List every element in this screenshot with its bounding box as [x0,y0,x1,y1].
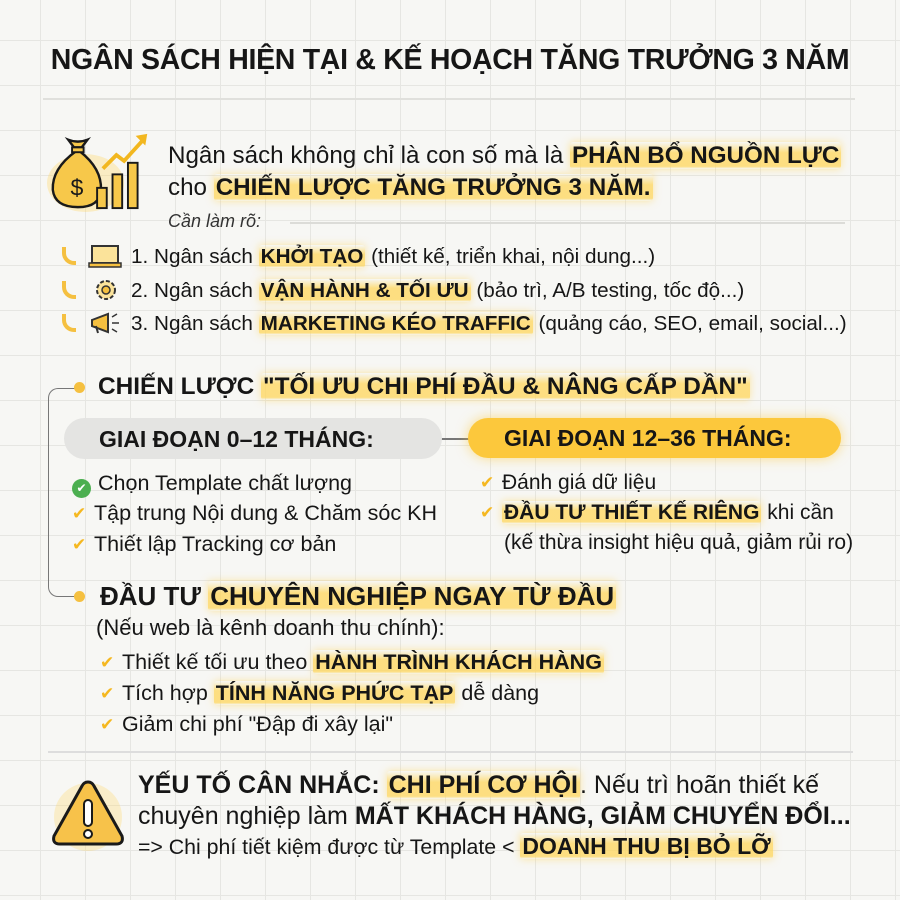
phase 1 bullets: ✔ [72,535,86,554]
dot [74,382,85,393]
icon: warning triangle [52,780,124,851]
title: NGÂN SÁCH HIỆN TẠI & KẾ HOẠCH TĂNG TRƯỞNG 3 NĂM [51,44,849,76]
invest bullets: Tích hợp TÍNH NĂNG PHỨC TẠP dễ dàng [122,681,539,705]
heading: invest professionally: ĐẦU TƯ CHUYÊN NGHIỆP NGAY TỪ ĐẦU [100,581,614,611]
connector line between pills [440,438,472,440]
phase 1 bullets: Chọn Template chất lượng [98,471,352,495]
item 1 [62,240,655,273]
pill: phase 0-12 [64,418,442,459]
icon: money bag with growth chart: $ [70,175,83,201]
pill: phase 0-12: GIAI ĐOẠN 0–12 THÁNG: [99,426,374,452]
invest bullets [100,645,609,736]
item 2: 2. Ngân sách VẬN HÀNH & TỐI ƯU (bảo trì, A/B testing, tốc độ...) [131,279,744,302]
phase 2 bullets: ✔ [480,473,494,492]
phase 2 bullets: ✔ [480,503,494,522]
warning text: chuyên nghiệp làm MẤT KHÁCH HÀNG, GIẢM CHUYỂN ĐỔI... [138,802,851,830]
warning text [138,766,851,864]
pill: phase 12-36: GIAI ĐOẠN 12–36 THÁNG: [504,425,792,451]
warning text: => Chi phí tiết kiệm được từ Template < DOANH THU BỊ BỎ LỠ [138,833,771,859]
item 3: 3. Ngân sách MARKETING KÉO TRAFFIC (quảng cáo, SEO, email, social...) [131,312,847,335]
phase 1 bullets: ✔ [72,504,86,523]
phase 2 bullets: (kế thừa insight hiệu quả, giảm rủi ro) [504,531,853,554]
intro text [168,137,846,206]
invest bullets: ✔ [100,684,114,703]
phase 2 bullets [480,471,853,554]
invest bullets: Giảm chi phí "Đập đi xây lại" [122,712,393,736]
item 1: 1. Ngân sách KHỞI TẠO (thiết kế, triển khai, nội dung...) [131,245,655,268]
icon: money bag with growth chart [47,134,148,212]
phase 1 bullets: ✔ [76,481,87,495]
dot [74,591,85,602]
intro text: Ngân sách không chỉ là con số mà là PHÂN BỔ NGUỒN LỰC [168,142,839,169]
pill: phase 12-36 [468,418,841,458]
phase 2 bullets: Đánh giá dữ liệu [502,471,656,494]
item 2 [62,274,744,307]
strategy heading: CHIẾN LƯỢC "TỐI ƯU CHI PHÍ ĐẦU & NÂNG CẤP DẦN" [98,373,748,400]
subheading: can lam ro: Cần làm rõ: [168,211,261,231]
bracket connector [48,388,78,597]
phase 1 bullets [72,471,437,556]
phase 1 bullets: Tập trung Nội dung & Chăm sóc KH [94,501,437,525]
invest bullets: ✔ [100,653,114,672]
invest bullets: ✔ [100,715,114,734]
item 3 [62,307,847,340]
phase 1 bullets: Thiết lập Tracking cơ bản [94,532,336,556]
phase 2 bullets: ĐẦU TƯ THIẾT KẾ RIÊNG khi cần [504,501,834,524]
intro text: cho CHIẾN LƯỢC TĂNG TRƯỞNG 3 NĂM. [168,174,651,201]
budget list [62,240,847,340]
condition text: (Nếu web là kênh doanh thu chính): [96,615,445,640]
warning text: YẾU TỐ CÂN NHẮC: CHI PHÍ CƠ HỘI. Nếu trì hoãn thiết kế [138,771,819,799]
invest bullets: Thiết kế tối ưu theo HÀNH TRÌNH KHÁCH HÀNG [122,650,602,674]
